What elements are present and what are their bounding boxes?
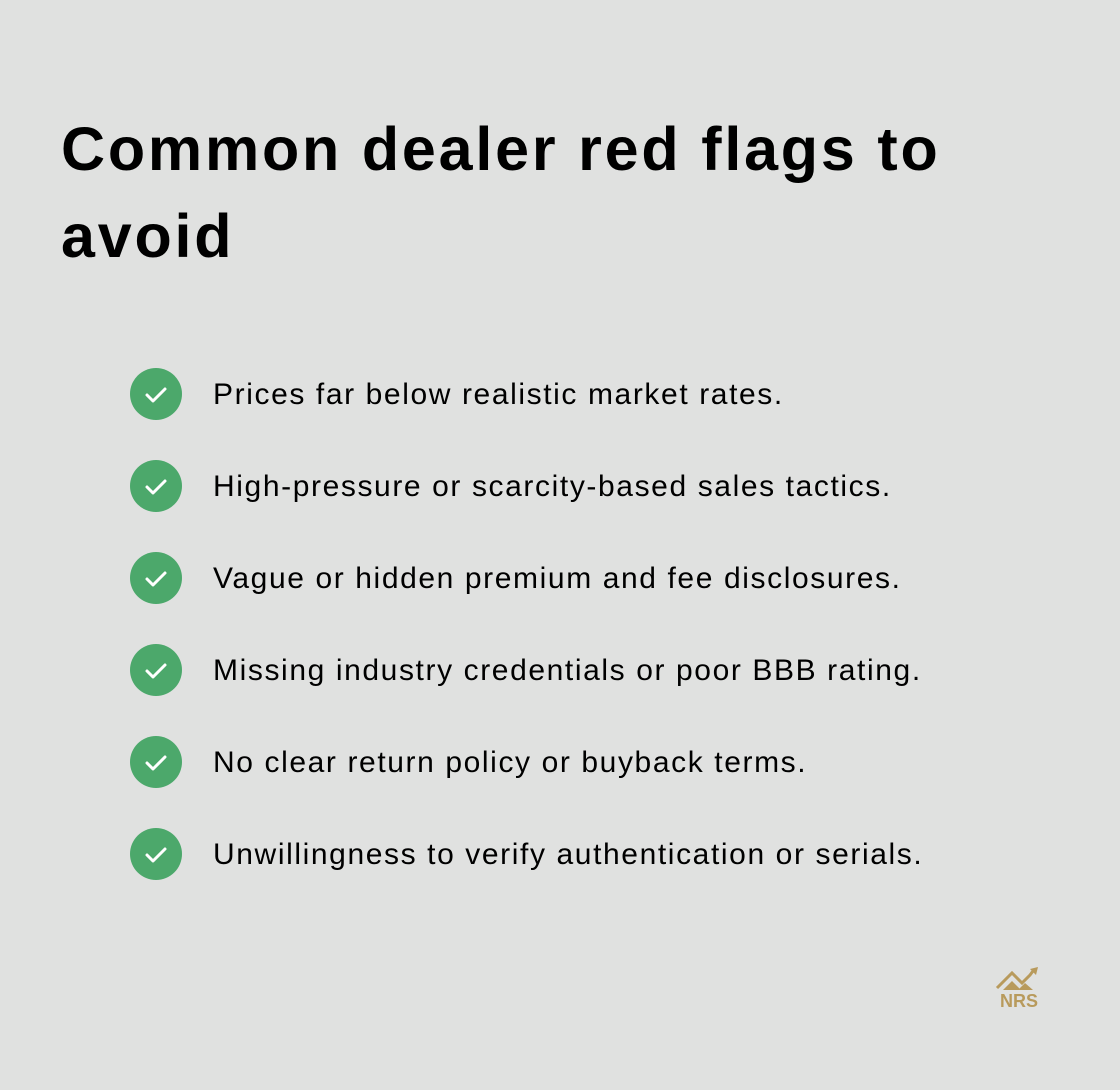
logo: NRS [996,967,1038,1010]
list item 2: High-pressure or scarcity-based sales tactics. [213,470,892,503]
title: Common dealer red flags to avoid [61,115,941,270]
list item 4 [130,644,922,696]
list item 6 [130,828,923,880]
list item 3 [130,552,902,604]
list item 6: Unwillingness to verify authentication or serials. [213,838,923,871]
list item 4: Missing industry credentials or poor BBB rating. [213,654,922,687]
list item 2 [130,460,892,512]
list item 5 [130,736,807,788]
list item 3: Vague or hidden premium and fee disclosures. [213,562,902,595]
list item 1 [130,368,784,420]
list item 5: No clear return policy or buyback terms. [213,746,807,779]
list item 1: Prices far below realistic market rates. [213,378,784,411]
